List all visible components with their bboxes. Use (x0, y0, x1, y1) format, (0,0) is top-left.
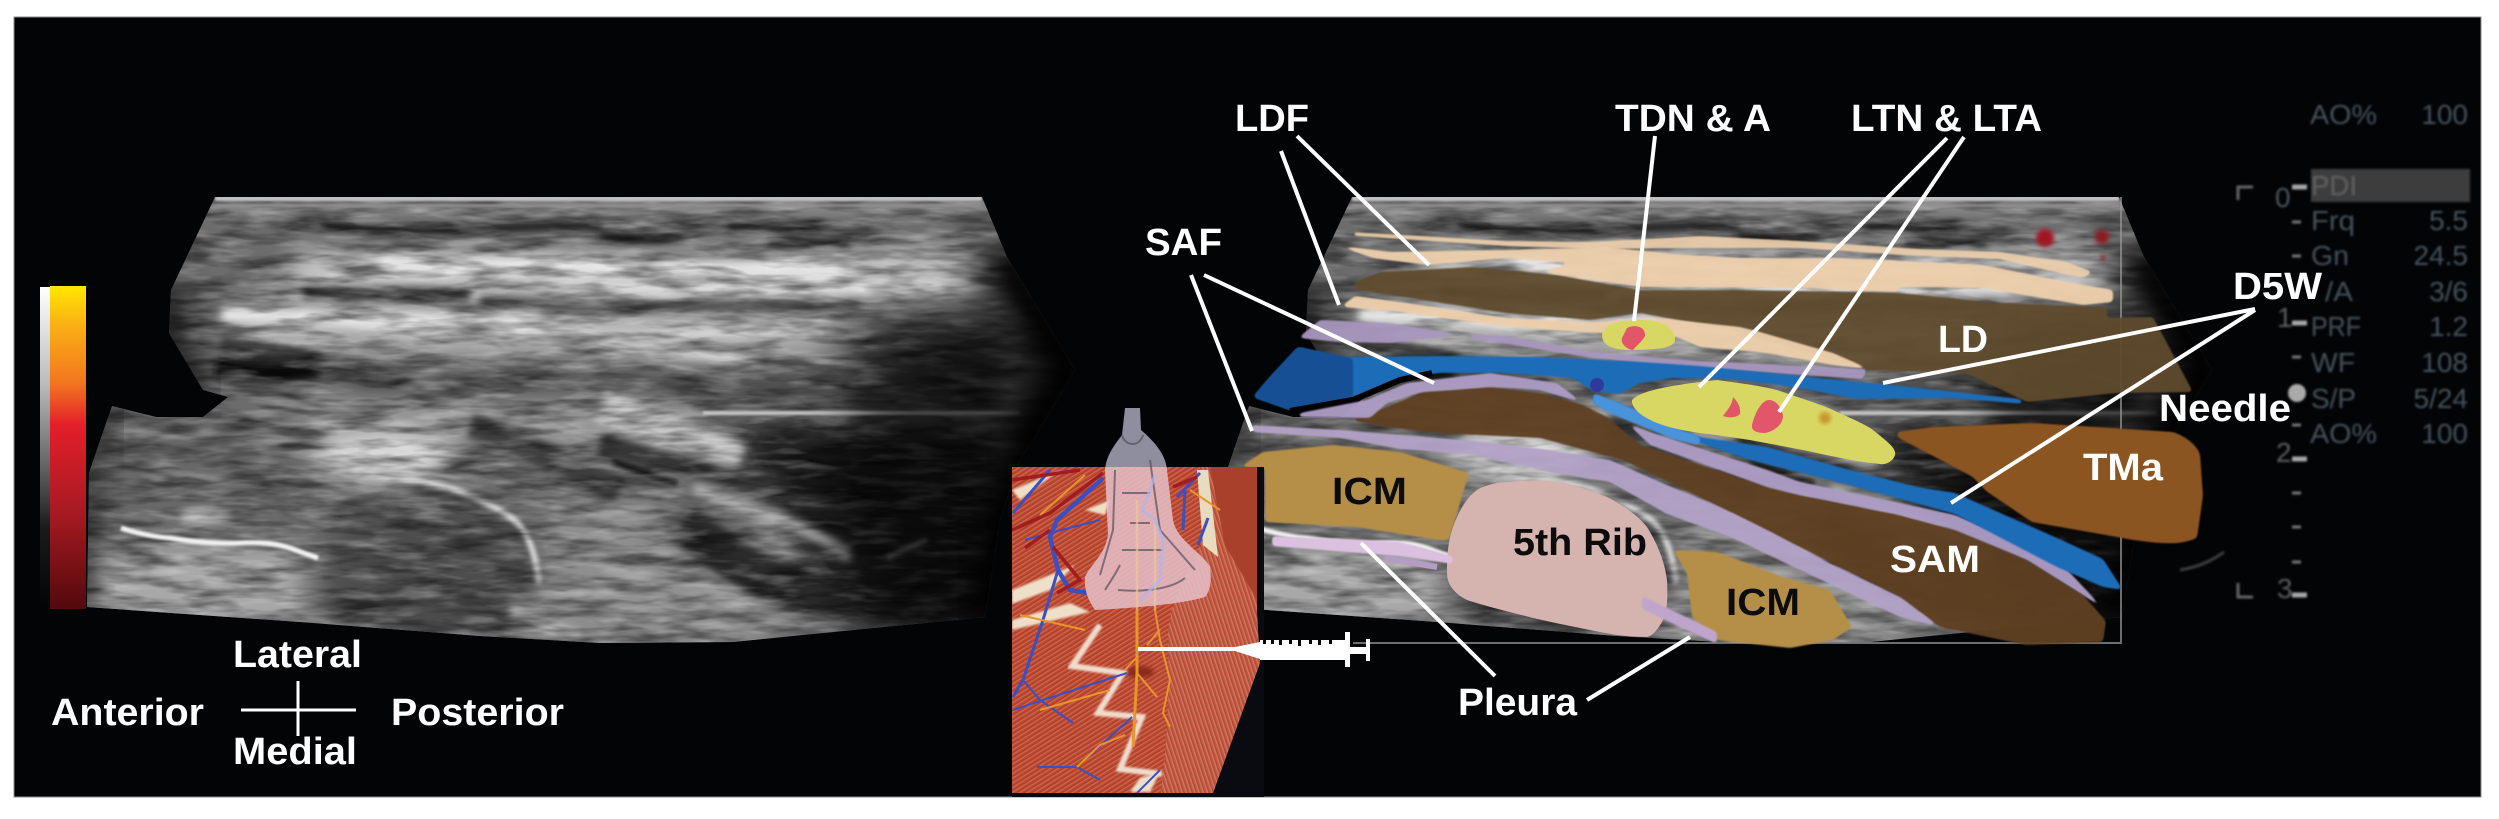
settings values: 100 (2421, 418, 2468, 449)
settings names (2310, 99, 2377, 449)
settings names: /A (2325, 276, 2353, 307)
latissimus dorsi muscle (1353, 267, 2193, 402)
D5W blue layer upper (1253, 347, 2025, 410)
settings values: 5.5 (2429, 205, 2468, 236)
depth scale: 2 (2276, 437, 2292, 468)
serratus fascia arch (1297, 373, 1583, 418)
intercostal muscle upper (1240, 445, 1469, 540)
depth scale: 0 (2275, 182, 2291, 213)
thoracodorsal nerve yellow (1602, 320, 1675, 350)
long thoracic nerve yellow (1632, 380, 1895, 464)
settings names: WF (2311, 347, 2355, 378)
white tendon top left (1012, 470, 1160, 792)
depth scale: 1 (2277, 302, 2293, 333)
dark upper muscle column (1210, 467, 1257, 600)
settings names: S/P (2311, 383, 2356, 414)
serratus anterior muscle (1350, 387, 2106, 645)
faint arc (2180, 552, 2224, 570)
settings values: 5/24 (2414, 383, 2468, 414)
black hypoechoic gap (1290, 373, 1432, 411)
orange nerves (1020, 475, 1220, 767)
vessel seen through probe (1140, 475, 1163, 600)
long lower purple fascia (1250, 425, 1940, 627)
orientation label anterior: Anterior (51, 692, 204, 734)
ultrasound probe (1085, 408, 1211, 610)
labels on annotated image: SAM (1890, 539, 1980, 581)
D5W light blue (1593, 393, 1700, 445)
settings names: AO% (2310, 418, 2377, 449)
panel: plain ultrasound image (40, 190, 1090, 773)
serratus fascia purple upper (1298, 320, 1463, 343)
pleura left lower segment (1385, 558, 1437, 567)
fascia peach upper thin (1353, 232, 2093, 278)
thoracodorsal artery red (1622, 326, 1645, 350)
inset muscle illustration (1012, 467, 1262, 800)
white tendon zigzag (1072, 625, 1162, 774)
probe lower translucent (1084, 467, 1211, 610)
settings values: 108 (2421, 347, 2468, 378)
colour scale bar (40, 286, 86, 609)
orientation label posterior: Posterior (391, 692, 564, 734)
fascia peach lower (1343, 296, 1872, 370)
settings names: AO% (2310, 99, 2377, 130)
labels on annotated image: LDF (1235, 98, 1309, 140)
settings values (2414, 99, 2468, 449)
syringe and needle (1138, 632, 1370, 667)
settings values: 24.5 (2414, 240, 2468, 271)
orange vessel (1819, 412, 1831, 424)
serratus fascia stripe (1627, 423, 2106, 611)
labels on annotated image: Pleura (1458, 682, 1578, 724)
focus marker dot (2288, 384, 2306, 402)
settings values: 100 (2421, 99, 2468, 130)
orientation label lateral: Lateral (233, 634, 362, 676)
labels on annotated image: TMa (2083, 447, 2164, 489)
panel: annotated ultrasound image (1145, 98, 2322, 724)
orientation marker (51, 634, 564, 773)
settings values: 3/6 (2429, 276, 2468, 307)
right muscle band (1160, 467, 1262, 800)
probe outline details (1100, 435, 1195, 591)
settings names: PDI (2311, 170, 2357, 201)
needle tip dark dot (1590, 378, 1604, 392)
orientation label medial: Medial (233, 731, 357, 773)
panel: anatomy inset with probe (1012, 408, 1370, 800)
fifth rib (1447, 480, 1667, 637)
labels on annotated image: TDN & A (1615, 98, 1771, 140)
intercostal muscle lower (1673, 550, 1852, 648)
settings names: Gn (2311, 240, 2349, 271)
labels on annotated image: ICM (1332, 471, 1407, 513)
labels on annotated image: LTN & LTA (1851, 98, 2042, 140)
labels on annotated image (1145, 98, 2322, 724)
labels on annotated image: SAF (1145, 222, 1222, 264)
settings names: PRF (2311, 311, 2361, 342)
long thoracic artery red small (1723, 397, 1740, 417)
depth scale: 3 (2277, 573, 2293, 604)
panel: machine settings readout (2180, 99, 2470, 604)
labels on annotated image: D5W (2233, 266, 2322, 308)
settings values: 1.2 (2429, 311, 2468, 342)
leader lines (1191, 136, 2255, 700)
D5W blue layer lower (1593, 393, 2123, 590)
fascia peach upper wide (1335, 245, 2113, 305)
region frame (1353, 197, 2121, 643)
long thoracic artery red large (1752, 400, 1783, 433)
labels on annotated image: LD (1938, 319, 1988, 361)
vessels doppler (2036, 229, 2109, 261)
settings names: Frq (2311, 205, 2355, 236)
labels on annotated image: 5th Rib (1513, 522, 1647, 564)
inset dark backing (1012, 467, 1264, 797)
labels on annotated image: ICM (1726, 582, 1800, 624)
blue veins (1013, 470, 1208, 793)
orientation cross (241, 681, 356, 736)
shadow (1126, 666, 1154, 678)
nerve seen through probe (1137, 500, 1155, 610)
probe upper grey (1105, 408, 1167, 467)
pleura left segment (1272, 536, 1453, 564)
teres major muscle (1897, 423, 2203, 543)
settings highlight box (2311, 169, 2470, 202)
depth scale (2238, 182, 2307, 604)
D5W dark blue at left (1253, 347, 1353, 410)
pleura right segment (1642, 596, 1717, 644)
red arteries (1012, 470, 1197, 593)
cream rib strip (1197, 470, 1218, 557)
labels on annotated image: Needle (2159, 388, 2291, 430)
thin purple fascia (1470, 334, 1867, 379)
